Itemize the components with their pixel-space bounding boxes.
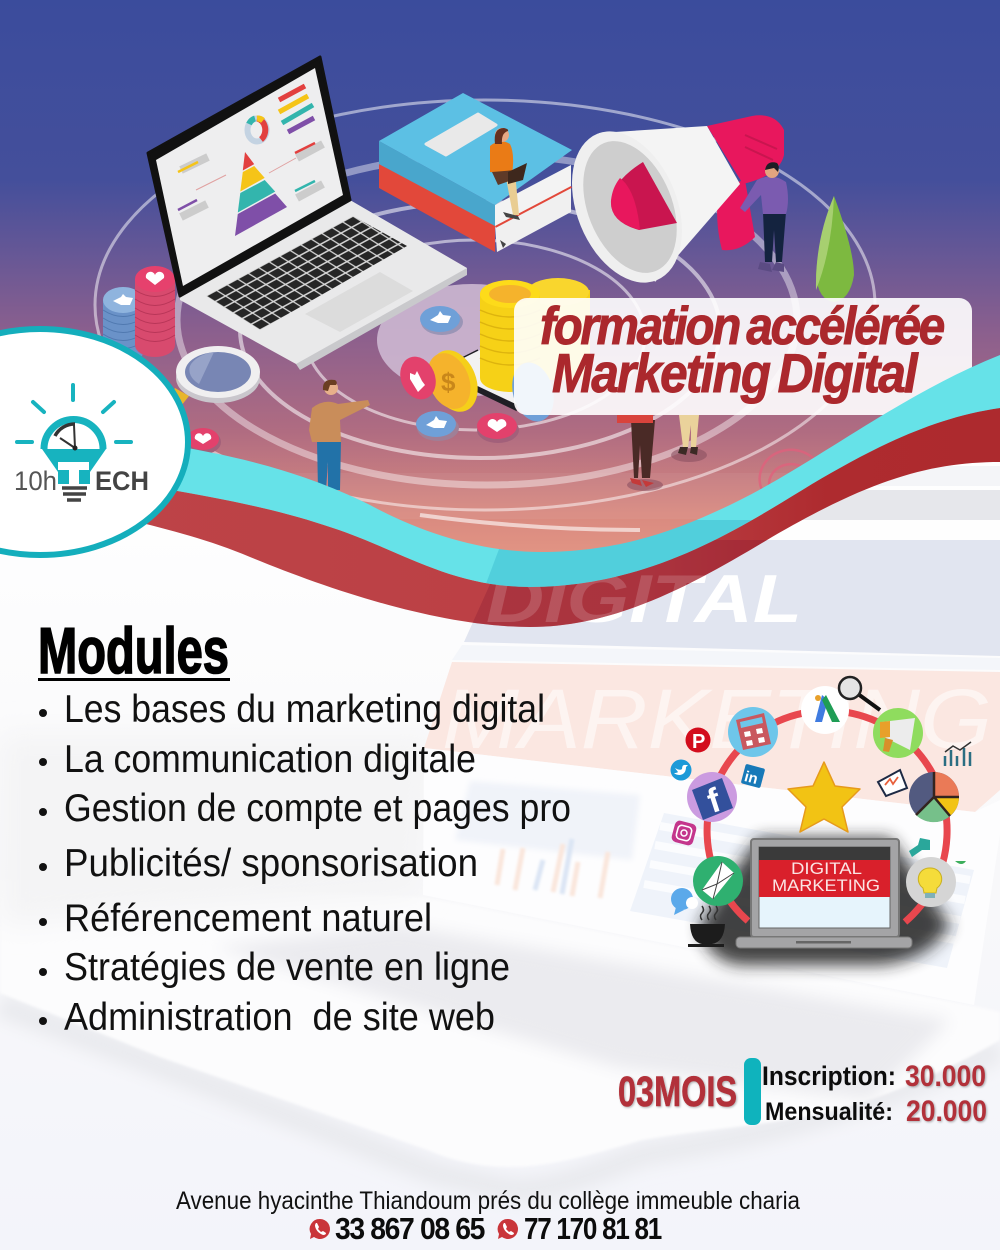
- chart legend: [178, 86, 323, 217]
- red ring: [707, 711, 947, 922]
- icon: coffee cup: [688, 906, 725, 947]
- icon: laptop: [736, 839, 912, 948]
- icon: phone 2: [498, 1219, 518, 1239]
- screen text DIGITAL: DIGITAL: [791, 859, 862, 878]
- dark shadow behind laptop: [700, 838, 950, 965]
- screen text MARKETING: MARKETING: [772, 876, 880, 895]
- icon: paint brush: [909, 838, 930, 857]
- list item 7: Administration de site web: [64, 996, 495, 1039]
- icon: gold coins and hearts: $: [441, 367, 456, 397]
- icon: linkedin: in: [742, 768, 760, 788]
- duration: 03MOIS: [618, 1068, 737, 1116]
- list item 2: La communication digitale: [64, 738, 476, 781]
- list item 5: Référencement naturel: [64, 897, 432, 940]
- price: monthly label: Mensualité:: [765, 1098, 893, 1126]
- icon: pinterest: P: [692, 731, 705, 753]
- list item 3: Gestion de compte et pages pro: [64, 787, 571, 830]
- icon: pinterest: [686, 728, 710, 753]
- list item 1: Les bases du marketing digital: [64, 688, 545, 731]
- icon: man pointing: [309, 380, 370, 490]
- title line 1: formation accélérée: [540, 297, 944, 356]
- icon: green leaf: [816, 196, 854, 302]
- digital marketing illustration: [670, 677, 971, 965]
- list item 4: Publicités/ sponsorisation: [64, 842, 478, 885]
- icon: chat bubble: [671, 888, 698, 915]
- icon: people behind title: [617, 415, 707, 491]
- icon: calculator: [728, 707, 778, 757]
- icon: twitter: [670, 760, 692, 780]
- pyramid chart: [235, 152, 287, 236]
- icon: email: [693, 856, 743, 906]
- price: inscription value: 30.000: [905, 1060, 986, 1093]
- wave: cyan band: [160, 355, 1000, 587]
- icon: star: [788, 762, 860, 832]
- faded word DIGITAL: DIGITAL: [486, 561, 802, 637]
- price: monthly value: 20.000: [906, 1095, 987, 1128]
- icon: gold coins and hearts: [394, 278, 590, 419]
- logo badge: [0, 329, 188, 555]
- icon: presentation board: [878, 770, 907, 796]
- wave: red panel tint: [472, 540, 767, 627]
- donut chart: [248, 118, 266, 142]
- title line 2: Marketing Digital: [552, 342, 919, 404]
- icon: stacked books: [379, 93, 572, 252]
- phone number 1: 33 867 08 65: [335, 1211, 485, 1246]
- icon: magnifying glass: [169, 346, 260, 406]
- icon: facebook: [687, 772, 737, 822]
- price: inscription label: Inscription:: [762, 1061, 896, 1091]
- phone number 2: 77 170 81 81: [524, 1211, 662, 1246]
- heading: Modules: Modules: [38, 614, 229, 687]
- gradient hero background: [0, 0, 1000, 595]
- accent bar: [744, 1058, 761, 1125]
- icon: light bulb clock: [17, 385, 131, 500]
- concentric target rings: [95, 100, 875, 530]
- icon: megaphone badge: [873, 708, 923, 758]
- wave: cyan panel tint: [486, 520, 752, 587]
- icon: magnifier: [839, 677, 880, 710]
- icon: faint fingerprint rings: [760, 450, 820, 490]
- icon: growth chart: [945, 742, 971, 766]
- logo wordmark 10h: 10h: [14, 466, 57, 496]
- title panel: [514, 297, 972, 415]
- icon: megaphone: [551, 115, 784, 299]
- icon: facebook: f: [703, 781, 726, 821]
- wave: red band: [130, 408, 1000, 627]
- icon: instagram: [671, 820, 697, 846]
- address: Avenue hyacinthe Thiandoum prés du collège immeuble charia: [176, 1187, 800, 1215]
- icon: man in purple shirt: [740, 162, 788, 272]
- icon: pie chart: [909, 772, 959, 822]
- icon: small leaf: [955, 861, 966, 864]
- icon: coin stacks left: [103, 266, 175, 365]
- module list: [39, 688, 571, 1039]
- icon: like and heart badges: [187, 306, 560, 454]
- icon: woman with laptop on books: [490, 128, 527, 248]
- icon: phone 1: [310, 1219, 330, 1239]
- icon: linkedin: [741, 764, 765, 788]
- icon: laptop with pyramid chart: [148, 57, 467, 370]
- logo wordmark ECH: ECH: [95, 466, 149, 496]
- faded word MARKETING: MARKETING: [442, 672, 992, 766]
- list item 6: Stratégies de vente en ligne: [64, 946, 510, 989]
- icon: google ads: [801, 686, 849, 734]
- wave: DIGITAL seen through red: DIGITAL: [486, 561, 802, 637]
- icon: light bulb badge: [906, 857, 956, 907]
- faded laptop background photo: [0, 450, 1000, 1250]
